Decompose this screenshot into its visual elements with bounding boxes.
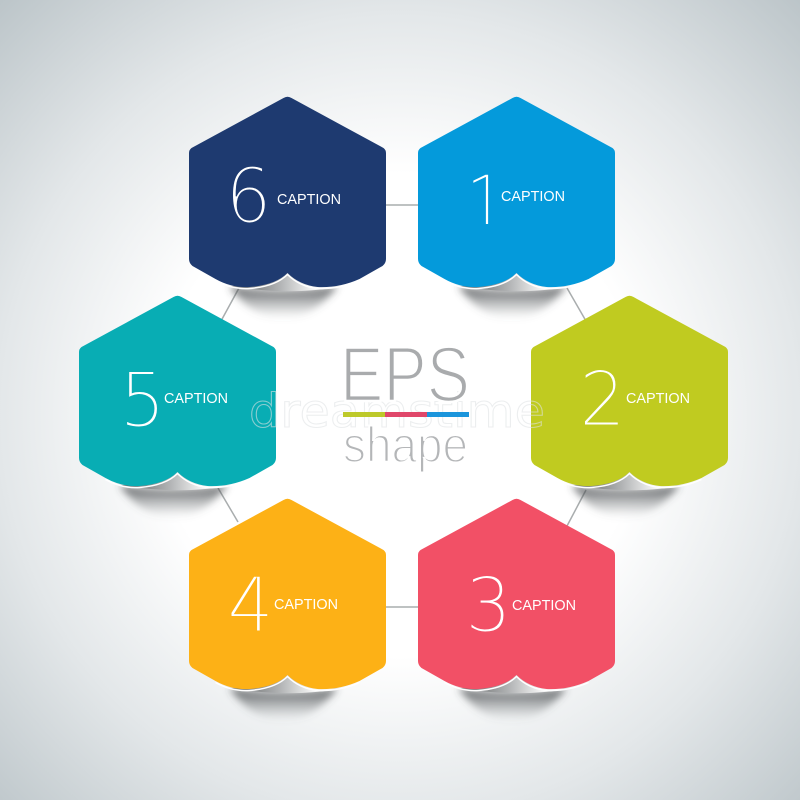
caption 1: CAPTION — [501, 188, 565, 205]
number 2: 2 — [580, 355, 626, 443]
watermark: dreamstime — [249, 384, 545, 438]
number 5: 5 — [120, 356, 166, 444]
caption 5: CAPTION — [164, 390, 228, 407]
center heading: EPS: EPS — [340, 330, 470, 418]
center subheading: shape: shape — [343, 417, 468, 473]
panel: step 3 — [418, 499, 615, 720]
caption 2: CAPTION — [626, 390, 690, 407]
panel: step 6 — [189, 97, 386, 318]
caption 4: CAPTION — [274, 596, 338, 613]
panel: step 4 — [189, 499, 386, 720]
panel: step 5 — [79, 296, 276, 517]
panel: step 2 — [531, 296, 728, 517]
number 3: 3 — [466, 561, 512, 649]
panel: step 1 — [418, 97, 615, 318]
connector lines — [218, 205, 586, 607]
caption 3: CAPTION — [512, 597, 576, 614]
caption 6: CAPTION — [277, 191, 341, 208]
number 1: 1 — [466, 159, 506, 247]
center color bar — [343, 412, 469, 417]
number 4: 4 — [228, 561, 274, 649]
number 6: 6 — [226, 152, 272, 240]
